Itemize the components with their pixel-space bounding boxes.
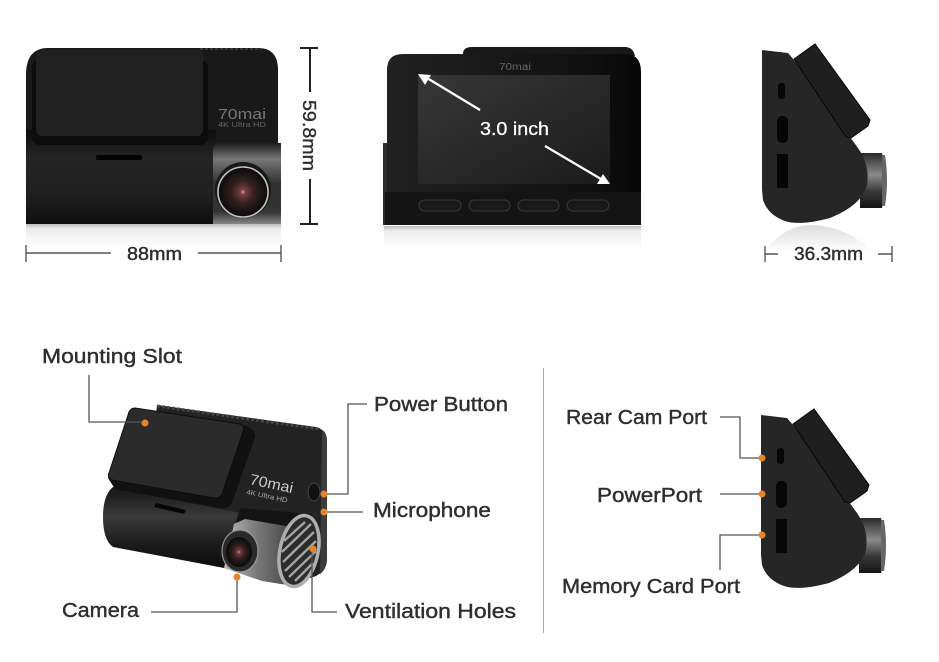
- callout: rear cam port: [566, 407, 766, 462]
- side view of dash cam: [762, 44, 887, 252]
- vent grille strip: [200, 48, 262, 50]
- slot: [154, 503, 186, 514]
- mounting plate: [108, 408, 244, 498]
- callout: power button: [320, 394, 508, 498]
- callout: rear cam port: Rear Cam Port: [566, 407, 707, 429]
- callout: microphone: [320, 500, 491, 522]
- screen size label: 3.0 inch: [480, 119, 549, 139]
- callout: memory card port: Memory Card Port: [562, 576, 740, 598]
- lens housing: [213, 143, 281, 224]
- slot: [96, 155, 142, 160]
- screen: [418, 75, 610, 184]
- callout: ventilation holes: [310, 546, 516, 623]
- perspective view of dash cam: [103, 405, 327, 590]
- button strip: [385, 192, 641, 225]
- right edge: [320, 430, 327, 574]
- callout: memory card port: [562, 532, 766, 598]
- camera rear body: [26, 48, 278, 150]
- dimension: depth 36.3mm: 36.3mm: [794, 244, 863, 264]
- logo subtitle: 4K Ultra HD: [218, 122, 266, 129]
- top mount: [463, 47, 635, 56]
- front view of dash cam: [26, 48, 281, 248]
- cylinder body: [103, 487, 240, 571]
- lens: [215, 162, 271, 218]
- reflection: [26, 224, 281, 248]
- lens: [222, 530, 258, 572]
- lens housing: [224, 519, 300, 587]
- callout: mounting slot: [42, 346, 183, 426]
- logo subtitle: 4K Ultra HD: [246, 489, 288, 505]
- mounting plate shadow: [32, 60, 208, 145]
- callout: camera: [62, 574, 240, 622]
- logo: 70mai: [499, 62, 531, 73]
- callout: power port: PowerPort: [597, 485, 702, 507]
- dimension: height 59.8mm: 59.8mm: [299, 100, 319, 171]
- divider: [542, 368, 544, 633]
- callout: power button: Power Button: [374, 394, 508, 416]
- rear view with screen: [383, 47, 641, 250]
- reflection: [384, 226, 641, 250]
- side view with ports: [761, 409, 886, 588]
- callout: camera: Camera: [62, 600, 140, 622]
- callout: mounting slot: Mounting Slot: [42, 346, 183, 368]
- arrow: to top left corner: [418, 74, 480, 110]
- logo: 70mai: [218, 106, 266, 123]
- housing dark top: [236, 508, 312, 540]
- dimension: height 59.8mm: [299, 48, 319, 224]
- rear body: [150, 405, 327, 578]
- dimension: width 88mm: 88mm: [127, 244, 182, 264]
- side bracket: [383, 143, 389, 225]
- mounting plate side: [108, 408, 255, 508]
- callout: power port: [597, 485, 766, 507]
- logo: 70mai: [248, 471, 295, 497]
- callout: ventilation holes: Ventilation Holes: [345, 601, 516, 623]
- top vent edge: [157, 406, 318, 429]
- callout: microphone: Microphone: [373, 500, 491, 522]
- body: [387, 54, 641, 225]
- buttons: [419, 200, 609, 211]
- power button: [308, 483, 320, 501]
- cylinder body: [26, 130, 216, 224]
- arrow: to bottom right corner: [545, 146, 610, 184]
- dimension: depth 36.3mm: [765, 244, 892, 264]
- ventilation grille: [273, 512, 325, 590]
- mounting plate: [36, 50, 203, 136]
- reflection: [766, 225, 872, 252]
- dimension: width 88mm: [26, 244, 281, 264]
